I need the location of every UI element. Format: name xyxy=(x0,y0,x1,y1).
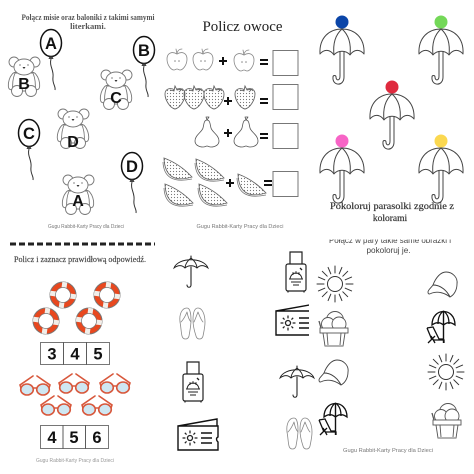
footer: Gugu Rabbit-Karty Pracy dla Dzieci xyxy=(48,224,124,230)
answer boxes: 3 4 5: 5 xyxy=(93,346,103,364)
umbrella blue xyxy=(320,16,364,84)
panel: holiday icons xyxy=(174,252,316,450)
balloon A: A xyxy=(45,35,57,53)
balloon B xyxy=(134,36,154,97)
umbrella green xyxy=(419,16,463,84)
umbrella pink xyxy=(320,134,364,203)
umbrella red xyxy=(370,80,414,149)
bear C xyxy=(98,70,134,110)
heading: colour instruction xyxy=(330,202,454,224)
icon: beach umbrella and chair xyxy=(427,311,455,343)
icon: suitcase xyxy=(286,252,306,292)
glasses xyxy=(20,374,130,415)
panel: pair and colour xyxy=(317,232,474,454)
bear D: D xyxy=(67,134,79,151)
heading: count fruit: Policz owoce xyxy=(202,19,282,35)
icon: cap xyxy=(428,272,457,297)
heading: match instruction xyxy=(22,12,155,31)
panel: count and mark xyxy=(10,244,155,464)
answer boxes: 4 5 6 xyxy=(40,426,108,448)
balloon D: D xyxy=(126,158,138,176)
answer boxes: 3 4 5: 3 xyxy=(47,346,57,364)
row: apples xyxy=(167,49,298,76)
icon: ticket xyxy=(178,419,218,450)
row: strawberries xyxy=(165,84,298,110)
balloon B: B xyxy=(138,42,150,60)
balloon D xyxy=(122,152,142,213)
row: pears xyxy=(195,117,298,148)
answer boxes: 3 4 5 xyxy=(40,342,110,364)
bear B xyxy=(6,57,42,96)
icon: clipped ticket xyxy=(275,304,309,336)
heading: match instruction: Połącz misie oraz baloniki z takimi samymi xyxy=(22,12,155,22)
heading: pair instruction: pokoloruj je. xyxy=(366,246,410,255)
footer: Gugu Rabbit-Karty Pracy dla Dzieci xyxy=(36,458,114,464)
bear A xyxy=(60,175,96,214)
balloon C xyxy=(18,120,40,180)
footer: Gugu Rabbit-Karty Pracy dla Dzieci xyxy=(196,224,284,230)
heading: pair instruction: Połącz w pary takie same obrazki i xyxy=(329,235,451,245)
bear D xyxy=(55,109,91,151)
balloon A xyxy=(40,30,62,90)
icon: beach umbrella and chair xyxy=(319,403,347,435)
row: watermelons xyxy=(163,158,298,206)
panel: colour the umbrellas xyxy=(320,16,463,224)
icon: ice cream xyxy=(432,404,461,438)
heading: match instruction: literkami. xyxy=(70,21,106,31)
heading: colour instruction: Pokoloruj parasolki zgodnie z xyxy=(330,202,454,212)
answer boxes: 3 4 5: 4 xyxy=(70,346,80,364)
answer boxes: 4 5 6: 5 xyxy=(69,429,79,447)
panel: match bears and balloons xyxy=(6,12,155,230)
footer: Gugu Rabbit-Karty Pracy dla Dzieci xyxy=(343,448,433,454)
icon: suitcase xyxy=(183,362,203,402)
icon: sun xyxy=(317,266,353,302)
icon: umbrella xyxy=(174,256,208,287)
icon: flip-flops xyxy=(287,418,312,449)
umbrella yellow xyxy=(419,134,463,203)
heading: pair instruction xyxy=(320,232,474,255)
answer boxes: 4 5 6: 4 xyxy=(47,429,57,447)
panel: count the fruit xyxy=(163,19,298,230)
icon: ice cream xyxy=(319,312,348,346)
decorative top border xyxy=(10,242,155,246)
bear B: B xyxy=(18,76,30,93)
icon: umbrella xyxy=(280,366,314,397)
bear A: A xyxy=(72,193,84,210)
life rings xyxy=(31,280,122,336)
bear C: C xyxy=(110,90,122,107)
icon: cap xyxy=(319,360,348,385)
balloon C: C xyxy=(23,125,35,143)
heading: colour instruction: kolorami xyxy=(373,214,408,224)
heading: count and mark: Policz i zaznacz prawidłową odpowiedź. xyxy=(14,254,146,264)
icon: flip-flops xyxy=(180,308,205,339)
answer boxes: 4 5 6: 6 xyxy=(92,429,102,447)
icon: sun xyxy=(428,354,464,390)
